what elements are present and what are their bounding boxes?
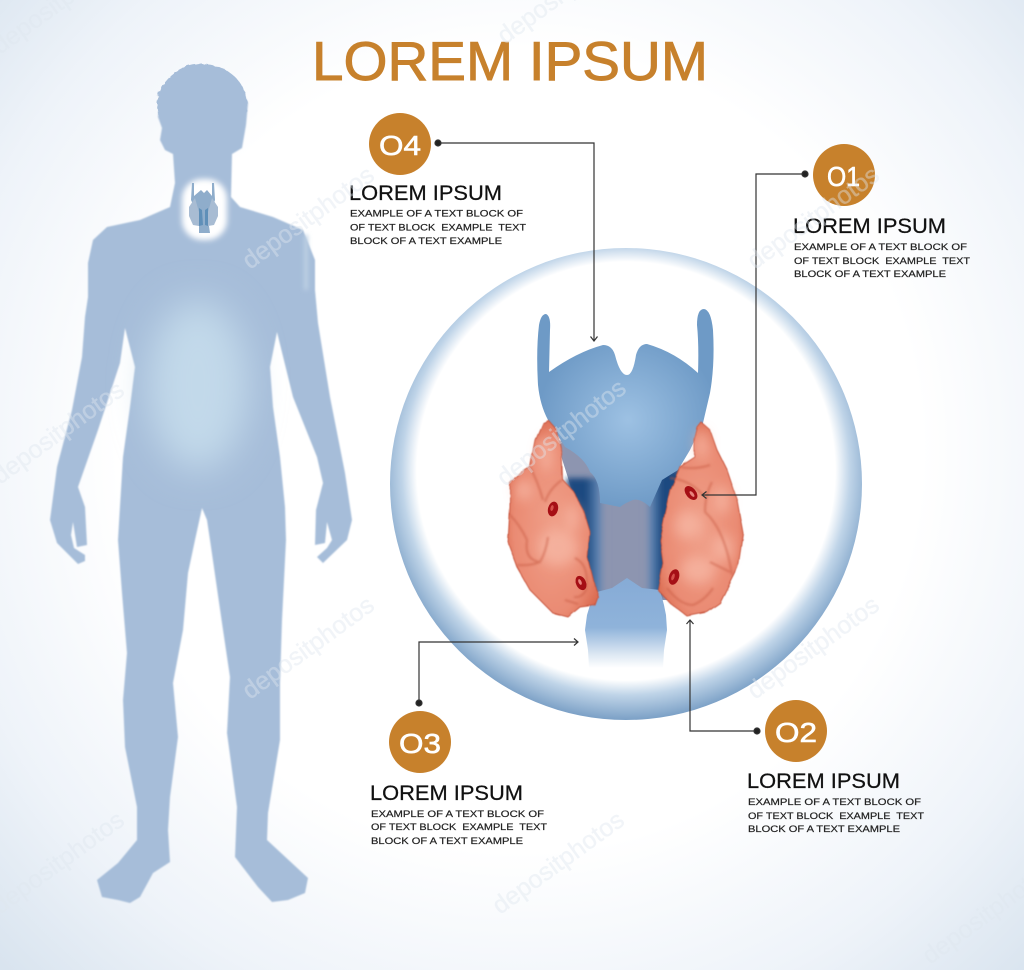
text block 01: BLOCK OF A TEXT EXAMPLE bbox=[794, 269, 946, 279]
text block 02 bbox=[747, 770, 924, 834]
text block 01 bbox=[793, 215, 970, 279]
connector 03 bbox=[416, 638, 578, 706]
shoulder highlight bbox=[304, 235, 308, 290]
text block 03: BLOCK OF A TEXT EXAMPLE bbox=[371, 836, 523, 846]
thyroid illustration bbox=[508, 309, 743, 668]
text block 04: BLOCK OF A TEXT EXAMPLE bbox=[350, 236, 502, 246]
left lobe bbox=[508, 420, 598, 617]
torso highlight bbox=[148, 300, 248, 470]
text block 04: EXAMPLE OF A TEXT BLOCK OF bbox=[350, 208, 523, 218]
text block 03: OF TEXT BLOCK EXAMPLE TEXT bbox=[371, 822, 547, 832]
text block 04 bbox=[349, 182, 526, 246]
badge 01: O1 bbox=[827, 161, 860, 192]
text block 04: OF TEXT BLOCK EXAMPLE TEXT bbox=[350, 222, 526, 232]
watermarks: depositphotos bbox=[237, 591, 379, 705]
connector 01 bbox=[702, 171, 808, 498]
text block 01: OF TEXT BLOCK EXAMPLE TEXT bbox=[794, 256, 970, 266]
badge 04 bbox=[369, 113, 431, 175]
text block 02: LOREM IPSUM bbox=[747, 770, 900, 793]
text block 01: EXAMPLE OF A TEXT BLOCK OF bbox=[794, 242, 967, 252]
magnifier circle bbox=[390, 248, 862, 720]
lobe highlights bbox=[515, 437, 579, 566]
text block 01: LOREM IPSUM bbox=[793, 215, 946, 238]
text block 02: BLOCK OF A TEXT EXAMPLE bbox=[748, 824, 900, 834]
nodule bbox=[682, 484, 700, 502]
gray isthmus area bbox=[556, 440, 680, 600]
badge 03 bbox=[389, 711, 451, 773]
nodule bbox=[667, 568, 681, 586]
lobe creases bbox=[510, 467, 587, 604]
dark shadows bbox=[566, 470, 684, 595]
text block 03 bbox=[370, 782, 547, 846]
nodule bbox=[546, 501, 560, 517]
human silhouette bbox=[50, 64, 352, 903]
watermarks: depositphotos bbox=[742, 161, 884, 275]
text block 03: EXAMPLE OF A TEXT BLOCK OF bbox=[371, 809, 544, 819]
connector 04 bbox=[435, 140, 598, 341]
text block 04: LOREM IPSUM bbox=[349, 182, 502, 205]
connector 02 bbox=[686, 620, 760, 734]
watermarks: depositphotos bbox=[491, 374, 631, 492]
badge 03: O3 bbox=[399, 728, 441, 759]
badge 04: O4 bbox=[379, 130, 421, 161]
badge 01 bbox=[813, 144, 875, 206]
title: LOREM IPSUM bbox=[312, 30, 708, 92]
text block 02: OF TEXT BLOCK EXAMPLE TEXT bbox=[748, 811, 924, 821]
badge 02 bbox=[765, 700, 827, 762]
lobe highlights bbox=[675, 430, 733, 584]
hair bbox=[157, 64, 247, 144]
neck glow bbox=[182, 179, 227, 240]
watermarks: depositphotos bbox=[487, 806, 629, 920]
text block 03: LOREM IPSUM bbox=[370, 782, 523, 805]
watermarks: depositphotos bbox=[742, 591, 884, 705]
badge 02: O2 bbox=[775, 717, 817, 748]
mini thyroid bbox=[189, 183, 218, 233]
larynx bbox=[537, 309, 714, 507]
trachea bbox=[585, 578, 667, 668]
watermarks: depositphotos bbox=[237, 161, 379, 275]
lobe creases bbox=[667, 465, 732, 605]
nodule bbox=[573, 574, 589, 592]
body shape bbox=[50, 70, 352, 903]
right lobe bbox=[658, 423, 743, 616]
text block 02: EXAMPLE OF A TEXT BLOCK OF bbox=[748, 797, 921, 807]
